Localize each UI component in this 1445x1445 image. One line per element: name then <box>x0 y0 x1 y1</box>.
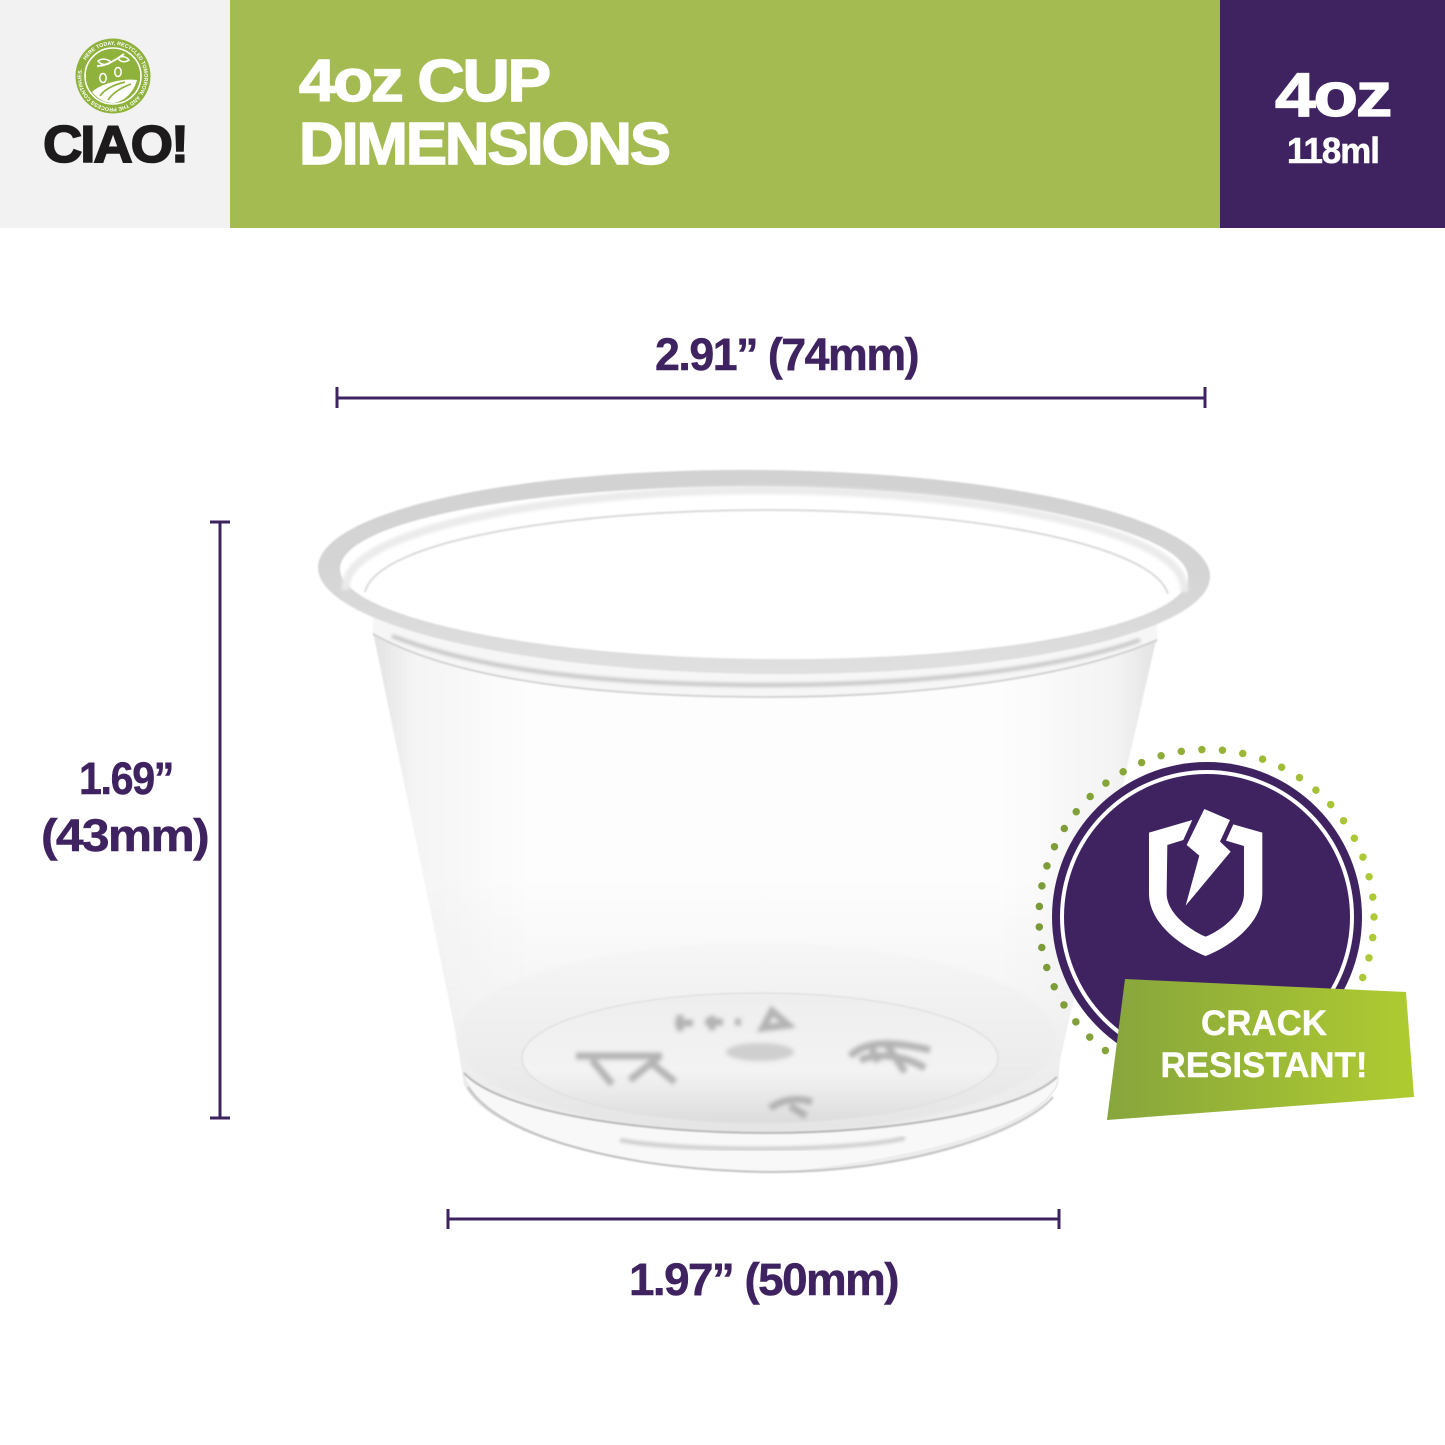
banner text <box>1160 1004 1368 1085</box>
white inner ring <box>1062 772 1352 1062</box>
banner text: RESISTANT! <box>1160 1046 1368 1085</box>
base center dimple <box>726 1043 794 1061</box>
dimension: top width <box>337 329 1205 408</box>
capacity value: 4oz <box>1275 61 1390 130</box>
top width label: 2.91” (74mm) <box>655 329 918 380</box>
product photo: clear plastic cup <box>317 465 1211 1172</box>
banner text: CRACK <box>1201 1004 1327 1043</box>
header: title band <box>230 0 1220 228</box>
embossed marks on base <box>576 1011 930 1116</box>
title: DIMENSIONS <box>299 111 670 177</box>
height label: (43mm) <box>41 810 208 861</box>
base width label: 1.97” (50mm) <box>629 1254 898 1305</box>
title <box>299 48 670 177</box>
height label: 1.69” <box>79 753 173 804</box>
icon: cracked shield with lightning <box>1149 809 1262 956</box>
dimension: height <box>41 522 230 1118</box>
cup base <box>457 943 1057 1172</box>
banner <box>1107 979 1414 1120</box>
dotted ring <box>1039 750 1374 1084</box>
badge: crack resistant <box>1039 750 1414 1120</box>
inner rim lines <box>346 490 1184 594</box>
rim <box>317 465 1211 679</box>
title: 4oz CUP <box>299 48 550 114</box>
base width line <box>448 1209 1059 1229</box>
icon: olive branch seal: HERE TODAY, RECYCLED TOMORROW, AND THE PROCESS CONTINUES. <box>78 41 148 112</box>
header: logo panel <box>0 0 230 228</box>
cup body <box>373 632 1157 1172</box>
top width line <box>337 387 1205 408</box>
purple disc <box>1052 762 1362 1072</box>
cup lower shading <box>425 880 1100 1172</box>
brand wordmark: CIAO! <box>43 116 187 174</box>
header: capacity panel <box>1220 0 1445 228</box>
height line <box>210 522 230 1118</box>
capacity value: 118ml <box>1287 130 1379 171</box>
height label <box>41 753 208 861</box>
dimension: base width <box>448 1209 1059 1305</box>
capacity value <box>1275 61 1390 171</box>
lower rim rings <box>373 600 1157 697</box>
